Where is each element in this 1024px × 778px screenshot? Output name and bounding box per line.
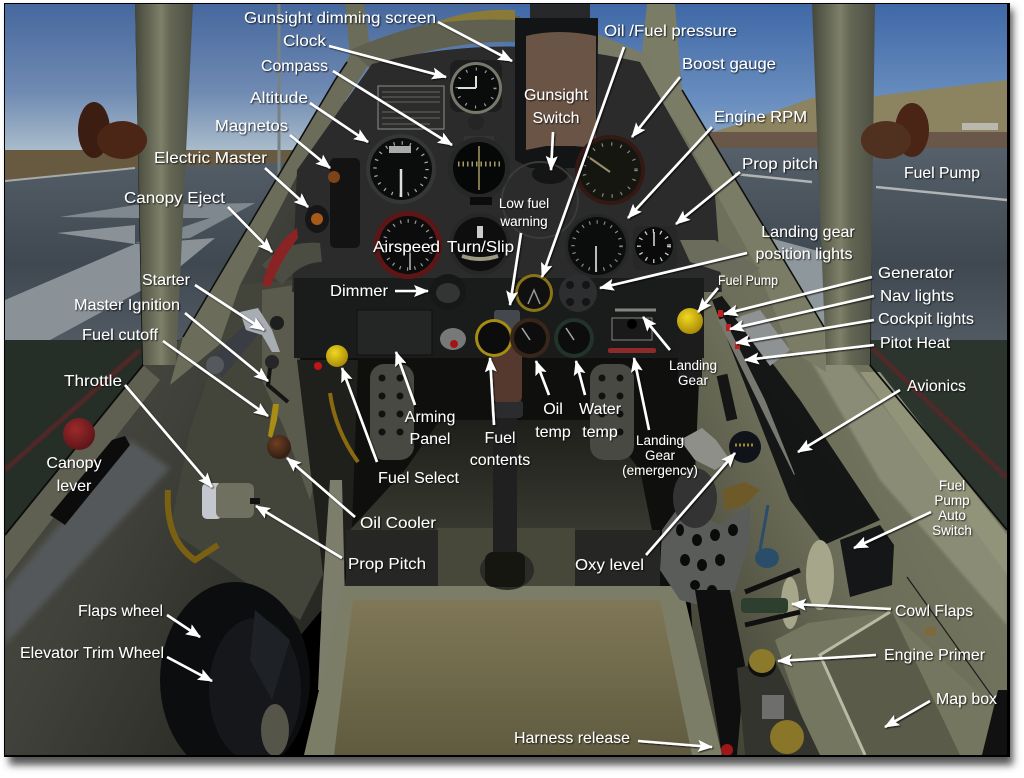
label: canopy lever: Canopy [46,455,102,472]
callout: magnetos: Magnetos [215,118,288,135]
switch plates [718,318,800,475]
sky left part [5,4,505,150]
callout: landing gear position lights [600,224,855,288]
callout: dimmer: Dimmer [330,283,389,300]
runway chevron two [57,225,135,244]
gauge: turn and slip [449,213,511,275]
callout: gunsight switch: Gunsight [524,87,589,104]
seat [304,586,722,755]
callout: arming panel: Panel [410,431,450,448]
callout: master ignition: Master Ignition [74,297,180,314]
callout: fuel contents: contents [470,452,530,469]
placard [378,86,444,129]
starter cylinder [208,320,262,378]
left canopy strut [135,4,193,365]
control stick [480,310,534,590]
corrugated hose [722,375,732,420]
left arch tube [262,243,322,285]
callout: prop pitch gauge [676,156,818,224]
callout: oil and fuel pressure [542,23,737,277]
label: fuel pump handle: Fuel Pump [904,165,980,182]
callout: water temp [576,361,622,441]
callout: electric master [154,150,308,207]
oil cooler knob [267,435,291,459]
right frame black line [682,90,824,327]
gauge: clock [450,60,502,130]
callout: starter [142,272,264,330]
right grass [865,340,1007,530]
gauge: oil and fuel pressure [515,274,553,312]
gauge: boost [575,135,645,205]
right sill line [869,262,1007,530]
engine primer knob [748,649,776,677]
canopy lever knob [63,418,95,450]
callout: fuel cutoff [82,327,268,416]
callout: oil cooler: Oil Cooler [360,515,437,532]
callout: oil and fuel pressure: Oil /Fuel pressure [604,23,737,40]
callout: gunsight dimming screen: Gunsight dimming screen [244,10,436,27]
fuel selector wire [330,393,358,462]
map box body [775,612,1007,755]
data plate [762,695,784,719]
callout: gunsight switch: Switch [532,110,580,127]
callout: prop pitch gauge: Prop pitch [742,156,818,173]
callout: arming panel [396,352,455,448]
red field lines [5,348,1007,478]
cowl flaps hub [781,577,799,629]
left side wall below frame [170,280,330,620]
right brown mushroom handle [861,103,929,159]
callout: fuel pump auto switch: Auto [938,508,966,523]
callout: landing gear position lights: position lights [756,246,852,263]
flaps and trim wheel [160,582,310,778]
callout: harness release: Harness release [514,730,630,747]
left wall highlight strip [5,440,170,645]
yellow wire [168,490,218,560]
left floor grate [346,530,438,587]
callout: altitude: Altitude [250,90,308,107]
callout: boost gauge [632,56,776,137]
canopy eject lever [262,228,298,287]
landing gear lever panel [612,310,656,340]
callout: dimmer [330,283,428,300]
cowl flaps green lever [741,598,788,613]
second gold knob [770,720,804,754]
callout: flaps wheel [78,603,200,637]
callout: low fuel warning [499,196,549,305]
left pedal [370,364,414,460]
label: turn and slip: Turn/Slip [447,239,514,256]
gauge: compass [448,136,510,205]
right outer band [860,372,1007,575]
top right bar [598,34,642,64]
left frame black line [183,62,347,337]
callout: landing gear emergency: Landing [636,433,684,448]
left control column [262,286,312,500]
callout: master ignition [74,297,268,381]
cowl flaps disc [806,540,834,610]
arming panel [357,310,432,355]
callout: altitude [250,90,368,142]
label: airspeed: Airspeed [373,239,440,256]
dark gap beside seat [695,590,745,755]
callout: clock [283,33,446,77]
callout: landing gear [643,317,717,388]
left brown mushroom handle [78,102,147,159]
runway chevron one [60,203,255,243]
callout: landing gear emergency [622,358,698,478]
callout: fuel select: Fuel Select [378,470,460,487]
callout: nav lights: Nav lights [880,288,954,305]
gauge: prop pitch [633,226,677,270]
gauge: gear position lights [559,274,597,312]
silver tubes [735,310,790,366]
small bronze bolt [925,627,936,636]
fuel selector knob [326,345,348,367]
callout: landing gear: Landing [669,358,717,373]
callout: starter: Starter [142,272,191,289]
fuel pump auto switch box [840,525,894,597]
label: canopy lever [46,455,102,495]
callout: cockpit lights [736,311,974,343]
gauge: airspeed [374,211,442,279]
callout: fuel cutoff: Fuel cutoff [82,327,159,344]
callout: landing gear: Gear [678,373,709,388]
gauge: water temp [554,318,594,358]
gauge: oil temp [510,318,550,358]
electric master switch [305,205,329,233]
callout: fuel pump auto switch: Pump [934,493,970,508]
callout: gunsight switch [524,87,589,170]
callout: clock: Clock [283,33,327,50]
callout: oil temp: temp [535,424,571,441]
callout: generator: Generator [878,265,955,282]
label: canopy lever: lever [57,478,92,495]
callout: cowl flaps: Cowl Flaps [895,603,973,620]
yellow nose [432,10,515,24]
oxygen bottle and cage [660,468,750,608]
callout: oil temp [535,361,571,441]
red round button [440,328,466,350]
oxygen hose [755,505,779,568]
callout: generator [724,265,955,314]
left runway white edge [5,168,135,181]
callout: cockpit lights: Cockpit lights [878,311,974,328]
map box black line [907,577,1007,717]
olive support tube [318,480,345,690]
callout: canopy eject [124,190,272,252]
pedal holes [378,374,624,436]
brown field right [700,132,1007,148]
right runway pale patch [772,238,825,332]
gauge: altitude [366,134,436,204]
callout: arming panel: Arming [405,409,455,426]
starter bolt [270,316,284,330]
right pedal [590,364,634,460]
right dark edge [982,690,1007,755]
callout: fuel pump switch: Fuel Pump [718,273,778,288]
callout: avionics [798,378,966,452]
callout: gunsight dimming screen [244,10,512,61]
callout: oxy level: Oxy level [575,557,644,574]
callout: landing gear emergency: (emergency) [622,463,698,478]
centre floor step [437,528,575,587]
instrument panel [292,46,722,292]
callout: low fuel warning: warning [499,214,548,229]
master ignition [265,355,288,402]
right windscreen frame [640,4,826,372]
floor well [300,358,700,590]
callout: nav lights [730,288,954,329]
cockpit lights switch [735,342,740,349]
callout: throttle [64,373,212,487]
left sill band [5,365,160,580]
sky right part [505,4,1007,132]
left sill line [5,4,143,535]
callout: engine primer: Engine Primer [884,647,986,664]
left windscreen frame [170,4,372,385]
callout: harness release [514,730,712,747]
floor plate [345,420,660,590]
cowl flaps rod [745,570,800,625]
callout: oil temp: Oil [543,401,563,418]
callout: compass [261,58,452,145]
right switch rail [712,296,880,545]
callout: fuel pump switch [698,273,778,312]
callout: landing gear position lights: Landing gear [761,224,855,241]
callout: engine RPM: Engine RPM [714,109,807,126]
callout: fuel contents [470,358,530,469]
right wall [660,93,1007,755]
brown field left [5,150,292,180]
right floor grate [575,530,660,587]
generator switch [718,310,723,317]
callout: throttle: Throttle [64,373,122,390]
hills right [713,80,1007,132]
callout: engine RPM [628,109,807,218]
map box pale edge [820,612,890,755]
callout: oil cooler [287,458,437,532]
gauge: dimmer [430,274,466,310]
callout: engine primer [778,647,986,664]
callout: oxy level [575,453,735,574]
map box shaded face [820,612,960,755]
starter end cap [206,356,224,374]
callout: avionics: Avionics [907,378,966,395]
callout: fuel contents: Fuel [484,430,516,447]
harness red knob [721,744,733,756]
callout: map box [885,691,997,727]
callout: water temp: temp [582,424,618,441]
callout: low fuel warning: Low fuel [499,196,549,211]
canopy rail slot [50,436,130,525]
right canopy strut [812,4,875,365]
oxygen valve [680,428,730,470]
right arch tube [680,240,760,280]
red lamp [314,362,322,370]
fuel cutoff handle [268,404,279,438]
emergency gear handle [608,348,656,353]
gauge: fuel contents [475,319,513,357]
callout: water temp: Water [579,401,622,418]
throttle cylinder [202,483,260,519]
starter lever [240,308,280,352]
magneto knob [328,171,340,183]
gauge: engine RPM [565,214,629,278]
callout: pitot heat [745,335,951,360]
callout: landing gear emergency: Gear [645,448,676,463]
right wall strips [812,332,1007,624]
callout: canopy eject: Canopy Eject [124,190,226,207]
nav lights switch [726,324,731,331]
callout: elevator trim wheel [20,645,212,681]
callout: cowl flaps [792,603,973,620]
callout: pitot heat: Pitot Heat [880,335,951,352]
callout: prop pitch lever: Prop Pitch [348,556,426,573]
callout: elevator trim wheel: Elevator Trim Wheel [20,645,164,662]
antenna wire strut [278,4,280,190]
magneto switch plate [330,158,360,248]
callout: magnetos [215,118,330,168]
lower right panel [737,660,820,755]
callout: map box: Map box [936,691,997,708]
callout: fuel pump auto switch [854,478,972,548]
avionics switch [790,443,796,452]
building on the right [962,123,998,130]
callout: fuel pump auto switch: Switch [932,523,972,538]
callout: fuel pump auto switch: Fuel [939,478,965,493]
callout: prop pitch lever [256,506,426,573]
runway tarmac [5,148,1007,340]
fuel pump knob [677,308,703,380]
oxygen gauge [729,431,761,463]
callout: electric master: Electric Master [154,150,268,167]
callout: boost gauge: Boost gauge [682,56,776,73]
left grass [5,340,145,535]
callout: compass: Compass [261,58,328,75]
right runway white edge [735,174,1007,200]
lower panel band [294,278,704,358]
callout: fuel select [342,368,460,487]
right black box [757,380,877,540]
oxygen regulator brass [722,482,760,510]
callout: flaps wheel: Flaps wheel [78,603,163,620]
runway chevron three [5,238,215,340]
left wall [5,70,345,755]
windscreen top bar [350,16,520,70]
left lower recess [297,360,358,590]
gunsight [502,4,598,238]
